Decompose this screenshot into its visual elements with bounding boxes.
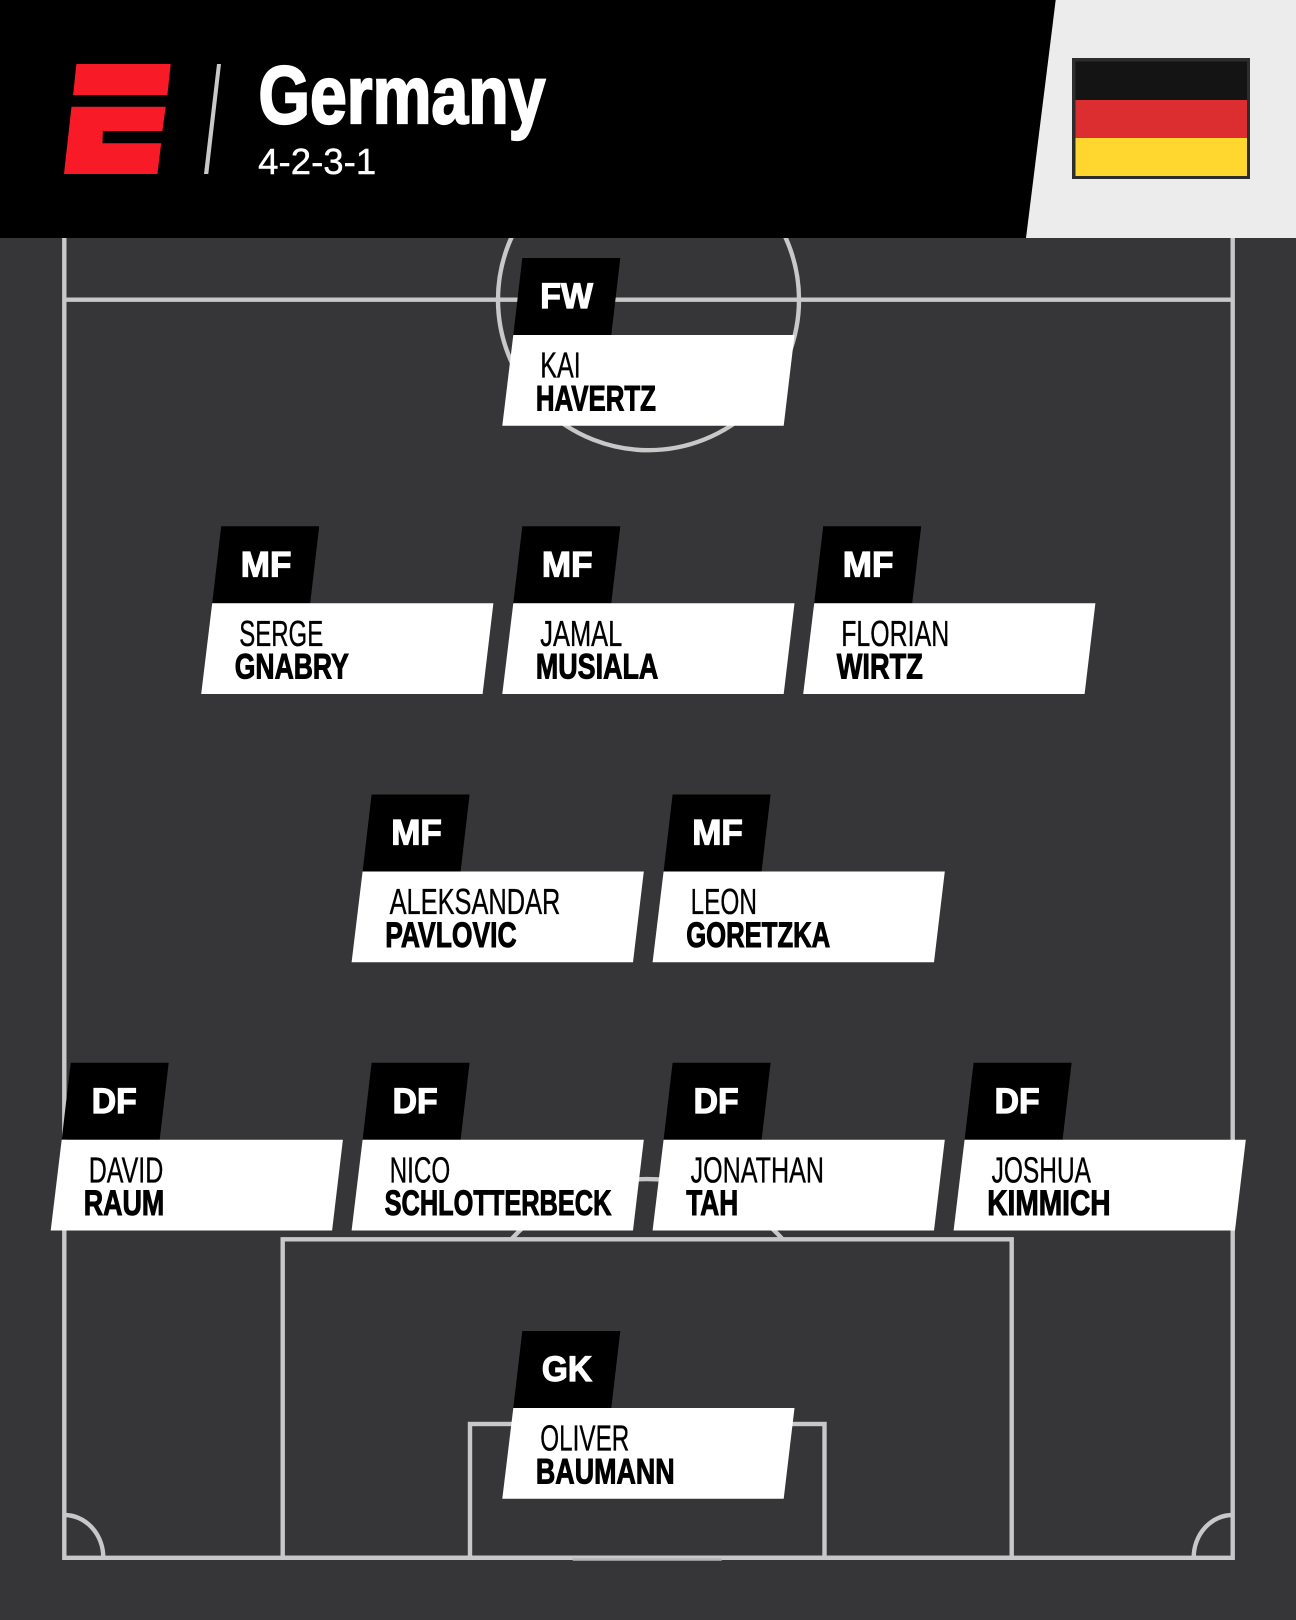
player card: Leon Goretzka: [653, 794, 945, 962]
player card: Jonathan Tah: TAH: [686, 1184, 738, 1223]
player card: Leon Goretzka: GORETZKA: [686, 916, 830, 955]
player card: David Raum: [51, 1063, 343, 1230]
player card: Jamal Musiala: MF: [542, 545, 592, 584]
player card: David Raum: DAVID: [89, 1149, 163, 1190]
player card: Aleksandar Pavlovic: ALEKSANDAR: [390, 881, 560, 922]
player card: Serge Gnabry: MF: [241, 545, 291, 584]
player card: Aleksandar Pavlovic: [352, 794, 644, 962]
player card: Aleksandar Pavlovic: PAVLOVIC: [385, 916, 517, 955]
player card: Oliver Baumann: GK: [542, 1350, 592, 1389]
player card: Oliver Baumann: BAUMANN: [536, 1452, 675, 1491]
player card: Nico Schlotterbeck: SCHLOTTERBECK: [385, 1184, 611, 1223]
player card: Serge Gnabry: GNABRY: [235, 648, 349, 687]
divider slash: [204, 64, 221, 174]
title: Germany: Germany: [258, 50, 546, 141]
player card: Oliver Baumann: [502, 1331, 794, 1499]
icon: German flag: [1072, 58, 1250, 179]
player card: Joshua Kimmich: DF: [995, 1082, 1040, 1121]
player card: Aleksandar Pavlovic: MF: [391, 814, 442, 852]
player card: Oliver Baumann: OLIVER: [540, 1418, 629, 1458]
player card: Kai Havertz: HAVERTZ: [536, 379, 656, 418]
player card: Serge Gnabry: SERGE: [239, 613, 323, 654]
player card: Jamal Musiala: JAMAL: [540, 613, 622, 654]
player card: Kai Havertz: KAI: [540, 344, 581, 386]
player card: Florian Wirtz: WIRTZ: [837, 648, 923, 687]
player card: Nico Schlotterbeck: DF: [393, 1082, 438, 1121]
player card: David Raum: RAUM: [84, 1184, 164, 1223]
player card: Nico Schlotterbeck: [352, 1063, 644, 1230]
player card: Florian Wirtz: MF: [843, 545, 893, 584]
icon: ESPN E logo: [64, 64, 171, 174]
pitch markings: [64, 149, 1233, 1560]
player card: Florian Wirtz: FLORIAN: [841, 613, 949, 654]
player card: Jamal Musiala: [502, 526, 794, 694]
player card: Nico Schlotterbeck: NICO: [390, 1149, 450, 1190]
player card: Jonathan Tah: DF: [694, 1082, 739, 1121]
player card: Kai Havertz: [502, 258, 794, 426]
player card: Jonathan Tah: JONATHAN: [691, 1149, 824, 1190]
player card: Jonathan Tah: [653, 1063, 945, 1230]
player card: Jamal Musiala: MUSIALA: [536, 648, 658, 687]
player card: Leon Goretzka: LEON: [691, 881, 757, 922]
player card: Kai Havertz: FW: [540, 277, 593, 316]
player card: Joshua Kimmich: JOSHUA: [992, 1149, 1091, 1190]
player card: Joshua Kimmich: [954, 1063, 1246, 1230]
formation label: 4-2-3-1: [258, 141, 376, 182]
player card: Joshua Kimmich: KIMMICH: [987, 1184, 1111, 1223]
player card: David Raum: DF: [92, 1082, 137, 1121]
header banner: [0, 0, 1296, 238]
player card: Serge Gnabry: [201, 526, 493, 694]
player card: Florian Wirtz: [803, 526, 1095, 694]
player card: Leon Goretzka: MF: [692, 814, 743, 852]
